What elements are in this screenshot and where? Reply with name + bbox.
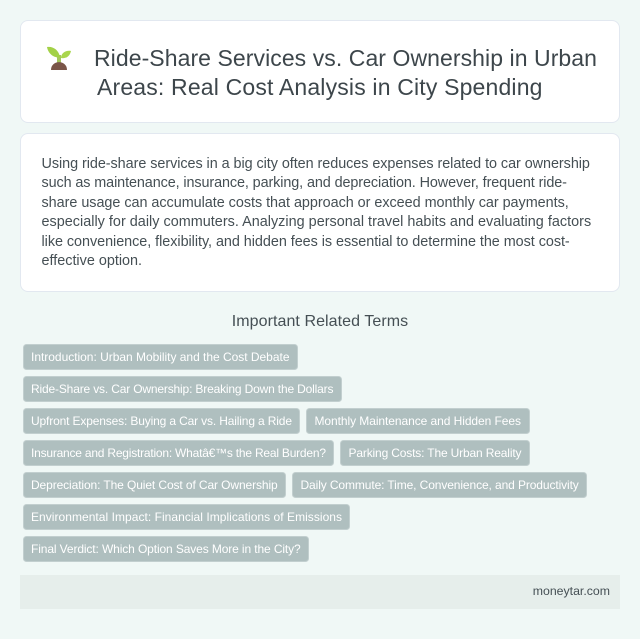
tag xyxy=(340,440,530,466)
summary text xyxy=(42,156,591,269)
tag: Ride-Share vs. Car Ownership: Breaking Down the Dollars xyxy=(31,382,334,396)
tag xyxy=(292,472,586,498)
tag: Introduction: Urban Mobility and the Cost Debate xyxy=(31,350,290,364)
tag: Insurance and Registration: Whatâ€™s the Real Burden? xyxy=(31,446,326,460)
tag: Monthly Maintenance and Hidden Fees xyxy=(314,414,521,428)
summary text: like convenience, flexibility, and hidden fees is essential to determine the most cost- xyxy=(42,234,570,250)
tag xyxy=(24,344,298,370)
tag xyxy=(24,376,342,402)
tag xyxy=(306,408,530,434)
tag xyxy=(24,536,308,562)
summary text: share usage can accumulate costs that approach or exceed monthly car payments, xyxy=(42,195,569,211)
source: moneytar.com xyxy=(533,584,610,598)
icon: seedling xyxy=(47,46,71,70)
term tags xyxy=(23,344,587,562)
title: Ride-Share Services vs. Car Ownership in Urban xyxy=(94,45,597,71)
tag: Upfront Expenses: Buying a Car vs. Hailing a Ride xyxy=(31,414,292,428)
tag: Environmental Impact: Financial Implications of Emissions xyxy=(31,510,342,524)
related terms heading: Important Related Terms xyxy=(232,313,408,330)
header panel xyxy=(20,20,620,123)
footer xyxy=(20,575,620,609)
tag: Final Verdict: Which Option Saves More in the City? xyxy=(31,542,301,556)
summary panel xyxy=(20,133,620,292)
summary text: Using ride-share services in a big city often reduces expenses related to car ownership xyxy=(42,156,590,172)
summary text: effective option. xyxy=(42,253,142,269)
tag xyxy=(24,472,286,498)
title xyxy=(94,45,597,100)
tag xyxy=(24,440,334,466)
summary text: especially for daily commuters. Analyzing personal travel habits and evaluating factors xyxy=(42,214,591,230)
summary text: such as maintenance, insurance, parking, and depreciation. However, frequent ride- xyxy=(42,175,567,191)
tag: Parking Costs: The Urban Reality xyxy=(348,446,522,460)
tag xyxy=(24,408,300,434)
tag xyxy=(24,504,350,530)
title: Areas: Real Cost Analysis in City Spending xyxy=(97,74,543,100)
tag: Daily Commute: Time, Convenience, and Productivity xyxy=(300,478,579,492)
tag: Depreciation: The Quiet Cost of Car Ownership xyxy=(31,478,278,492)
